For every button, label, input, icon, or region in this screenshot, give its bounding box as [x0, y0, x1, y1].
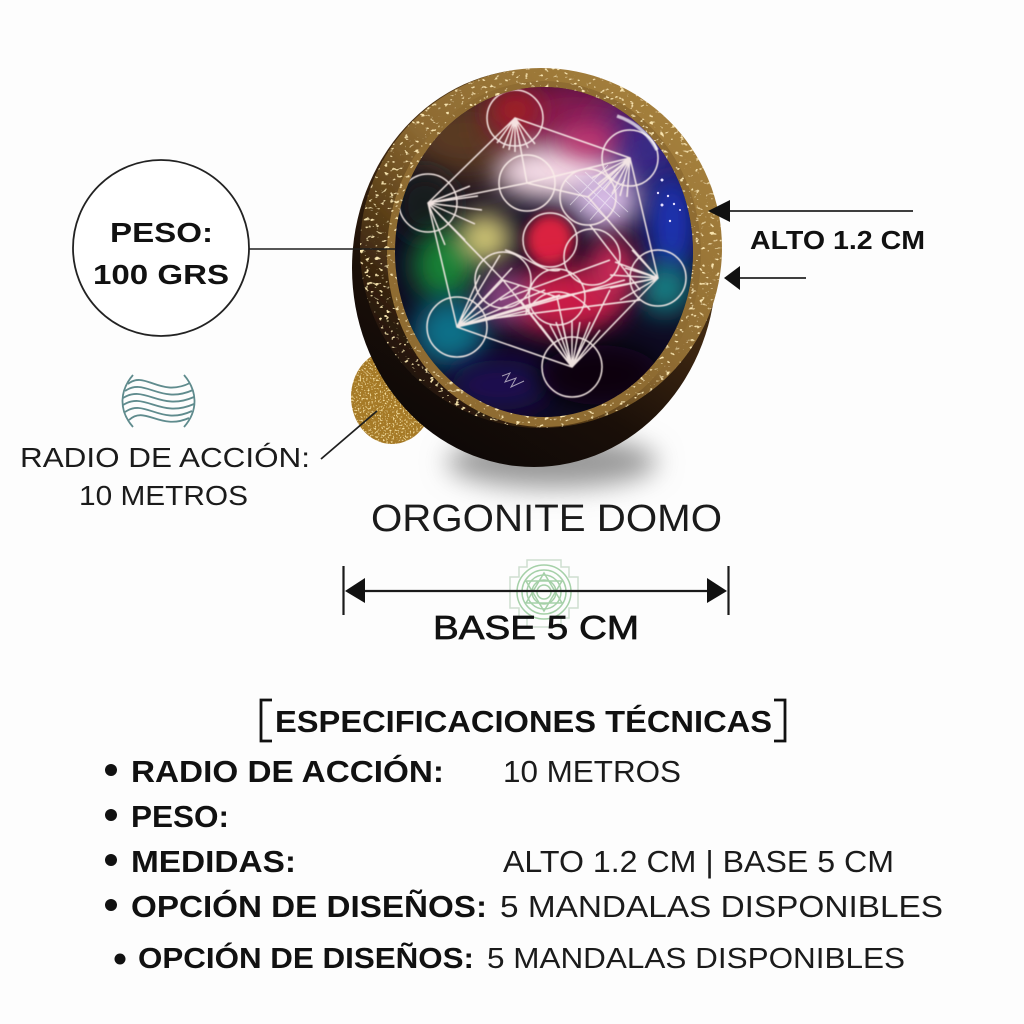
icon: mandala watermark [510, 560, 578, 627]
specifications list [105, 753, 943, 975]
dome body [352, 69, 716, 467]
highlights [425, 151, 426, 153]
spec row: opcion de disenos repeated [114, 941, 905, 975]
callout: peso: PESO: [110, 217, 213, 248]
callout: radio de accion [20, 411, 377, 511]
outer rim [360, 68, 722, 428]
spec row: radio de accion: RADIO DE ACCIÓN: [131, 753, 444, 789]
shadow under product [447, 436, 657, 488]
star field [657, 178, 681, 222]
spec row: opcion de disenos: OPCIÓN DE DISEÑOS: [131, 888, 487, 924]
callout: peso: 100 GRS [93, 259, 229, 290]
spec row: medidas: ALTO 1.2 CM | BASE 5 CM [503, 844, 894, 879]
spec row: opcion de disenos repeated: 5 MANDALAS DISPONIBLES [487, 943, 905, 975]
gold beaded ring [387, 81, 701, 427]
spec row: radio de accion: 10 METROS [503, 754, 681, 789]
spec row: opcion de disenos: 5 MANDALAS DISPONIBLES [500, 889, 943, 924]
callout: radio de accion: RADIO DE ACCIÓN: [20, 442, 310, 473]
specifications heading: ESPECIFICACIONES TÉCNICAS [275, 704, 772, 739]
spec row: peso: PESO: [131, 799, 229, 834]
dimension arrow: base [344, 566, 728, 615]
icon: waves [122, 375, 195, 427]
gold coin behind dome [351, 350, 433, 444]
leader line to dome [249, 248, 395, 250]
product: orgonite dome [249, 68, 722, 467]
spec row: medidas [105, 844, 894, 879]
metatron cube geometry [399, 90, 686, 397]
signature [502, 373, 524, 387]
callout: alto with arrows [708, 200, 925, 290]
callout: peso [73, 160, 249, 336]
spec row: radio de accion [105, 753, 681, 789]
label: base 5 cm: BASE 5 CM [433, 609, 639, 646]
title: ORGONITE DOMO [371, 498, 722, 540]
spec row: medidas: MEDIDAS: [131, 844, 296, 879]
spec row: opcion de disenos [105, 888, 943, 924]
mesh of fine lines [565, 165, 628, 222]
callout: alto with arrows: ALTO 1.2 CM [750, 225, 925, 255]
spec row: opcion de disenos repeated: OPCIÓN DE DISEÑOS: [138, 941, 474, 975]
cosmic artwork [390, 75, 700, 425]
callout: radio de accion: 10 METROS [79, 480, 248, 511]
